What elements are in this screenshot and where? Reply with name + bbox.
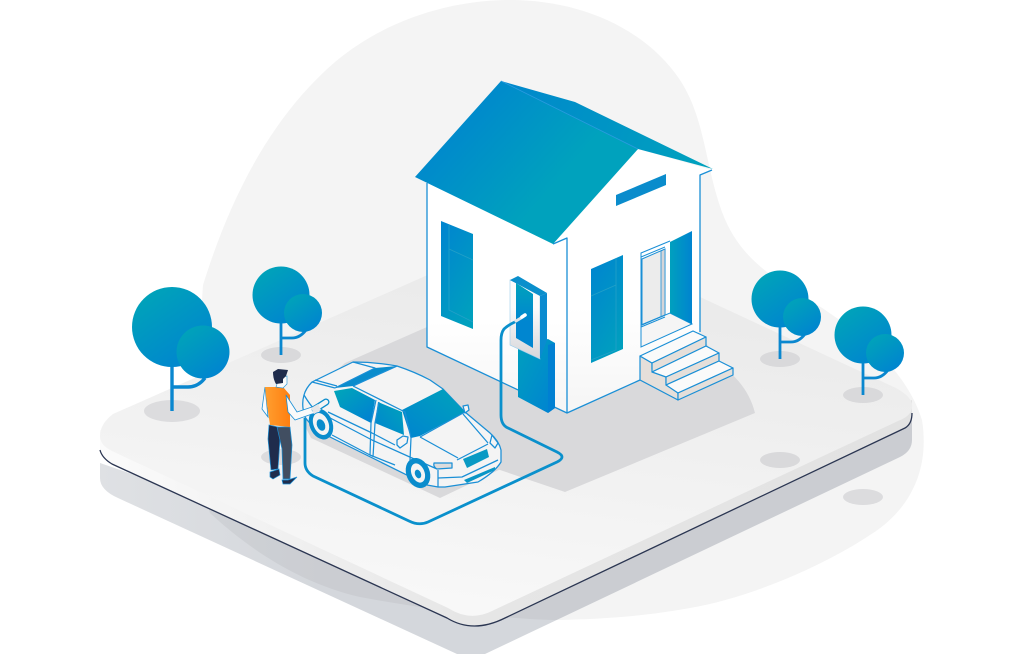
front wheel (401, 454, 435, 492)
left wall (427, 183, 567, 413)
house (415, 81, 733, 413)
large canopy (834, 306, 892, 364)
charging handle outline (315, 402, 326, 409)
right trouser leg (277, 427, 292, 479)
tree shadow (760, 351, 800, 367)
trunk stripe (335, 366, 397, 388)
hand (311, 404, 321, 414)
tree spot below platform (843, 489, 883, 505)
trunk and branch (281, 315, 306, 355)
windshield (402, 389, 465, 438)
side mirror (397, 436, 408, 448)
wall outlines (427, 170, 712, 413)
main roof slope (415, 81, 638, 244)
gable vent (616, 174, 666, 206)
tree: far left (132, 287, 230, 422)
window muntin (591, 258, 616, 360)
far headlight (490, 435, 498, 448)
tree: left back (252, 266, 322, 363)
right shoe (282, 477, 297, 484)
rear hub cap (315, 418, 327, 432)
car ground shadow (303, 390, 505, 498)
tree: far right (834, 306, 904, 403)
small canopy (176, 326, 230, 378)
trunk and branch (863, 356, 888, 395)
left window (441, 221, 473, 329)
charging plug (516, 315, 525, 321)
left trouser leg (268, 425, 280, 470)
body panel lines (304, 362, 498, 487)
window pane (591, 255, 623, 363)
platform (100, 224, 912, 626)
background blob (199, 0, 924, 620)
porch recess (670, 231, 692, 324)
porch (641, 231, 692, 347)
steps (640, 331, 733, 400)
front side window (375, 402, 404, 435)
large canopy (752, 270, 808, 328)
front gable wall (553, 149, 712, 413)
rear tyre (304, 405, 338, 443)
charger screen (516, 283, 533, 348)
charging cable (305, 321, 562, 524)
trunk and branch (780, 320, 805, 359)
step side (640, 356, 678, 400)
headlight (434, 463, 452, 469)
wall charger (510, 276, 555, 413)
small canopy (783, 298, 821, 336)
porch frame (641, 241, 670, 347)
charger box (518, 339, 555, 413)
plug tip (522, 315, 525, 317)
back roof slope (501, 81, 713, 169)
middle riser (666, 353, 719, 385)
window pane (441, 221, 473, 329)
roof ridge line (501, 81, 638, 149)
lower grille (464, 467, 495, 483)
platform edge (100, 400, 912, 626)
charging handle (315, 402, 326, 409)
charger box side (548, 343, 555, 413)
trunk and branch (172, 345, 205, 411)
rear wheel (304, 405, 338, 443)
tree shadow (843, 387, 883, 403)
bottom step (666, 361, 733, 393)
orange vest (265, 387, 290, 427)
top riser (652, 337, 706, 372)
middle step (652, 346, 719, 377)
front hub cap (414, 469, 422, 479)
window muntin (449, 225, 473, 322)
left shoe (270, 469, 280, 479)
platform top surface (100, 224, 912, 616)
tree shadow (144, 400, 200, 422)
large canopy (132, 287, 212, 367)
top step (640, 331, 706, 363)
right window (591, 255, 623, 363)
car body (303, 362, 501, 487)
charger top (510, 276, 547, 296)
plug sleeve (516, 318, 521, 321)
small canopy (866, 334, 904, 372)
far mirror (463, 405, 469, 413)
large canopy (252, 266, 310, 324)
person (261, 369, 326, 484)
door jamb (661, 249, 665, 317)
grille (463, 449, 489, 468)
rear side window (334, 388, 375, 423)
empty tree spot on platform (760, 452, 800, 468)
charger side (540, 293, 547, 359)
house ground shadow (320, 320, 755, 492)
porch floor (641, 313, 692, 347)
platform drop shadow (100, 415, 912, 654)
front tyre (401, 454, 435, 492)
tree: right back (752, 270, 821, 367)
face (276, 376, 287, 388)
platform dark base line (100, 413, 912, 626)
bottom riser (678, 368, 733, 400)
tree shadow (261, 347, 301, 363)
front hub (408, 461, 428, 485)
rear hub (310, 411, 332, 437)
car (303, 362, 501, 492)
hair (273, 369, 288, 384)
left sleeve (262, 387, 268, 417)
small canopy (284, 294, 322, 332)
right arm (286, 395, 320, 420)
door (642, 249, 665, 325)
charger frame (510, 280, 540, 359)
ground shadow (261, 449, 301, 465)
